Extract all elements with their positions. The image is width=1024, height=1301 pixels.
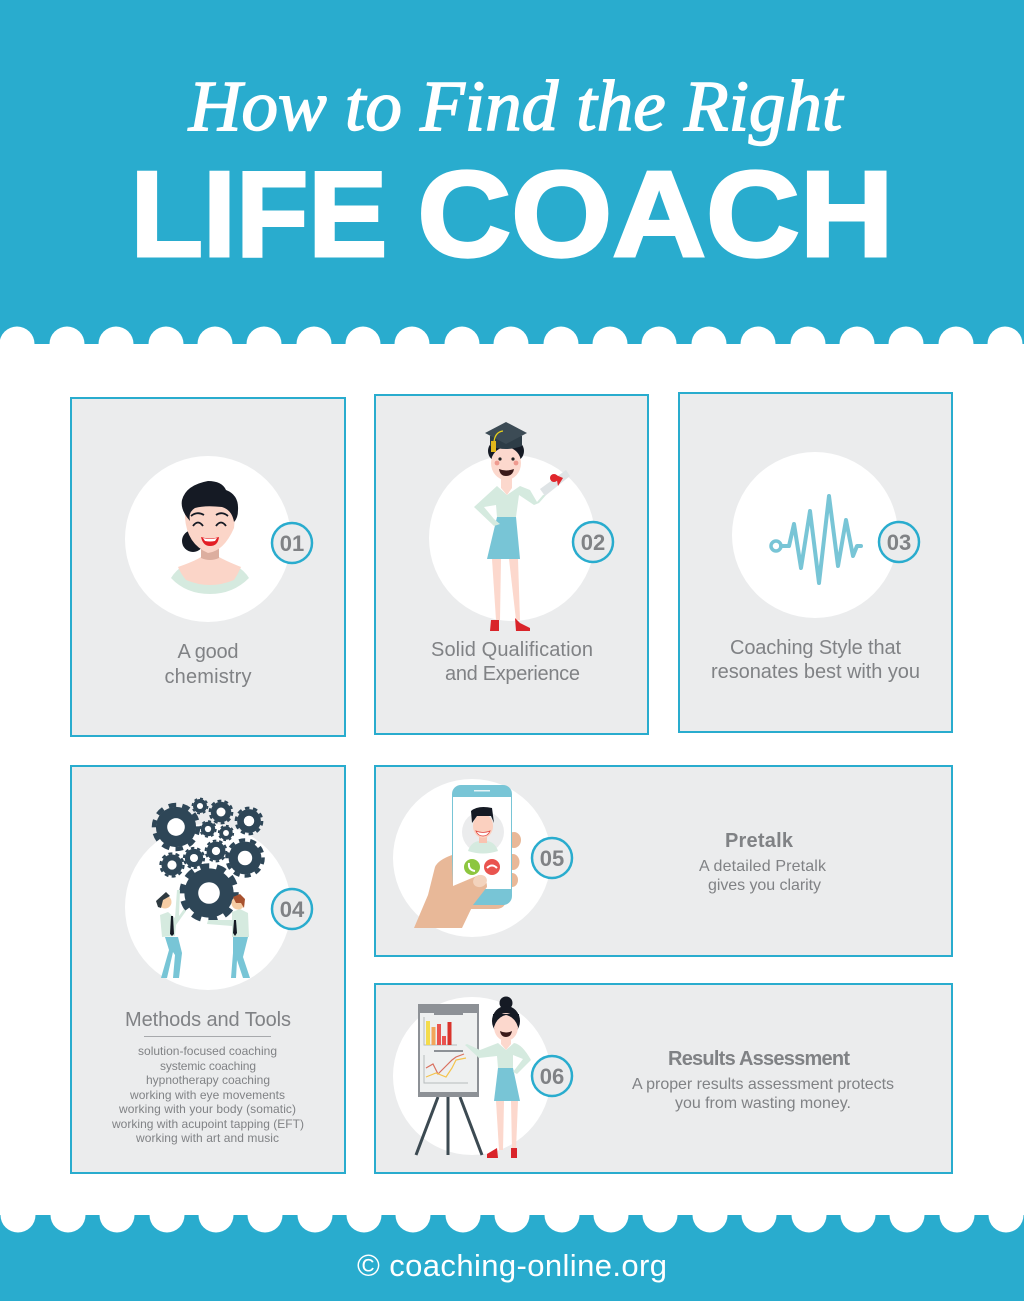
list of methods: systemic coaching: [160, 1059, 256, 1073]
badge 05: [532, 838, 572, 878]
label 03: resonates best with you: [711, 661, 920, 683]
title: main line: COACH: [417, 146, 894, 282]
title: script line: How to Find the Right: [188, 65, 844, 146]
label 01: A good: [178, 641, 238, 663]
text: results assessment: A proper results assessment protects: [632, 1076, 894, 1093]
icon: graduate woman with diploma: [474, 422, 570, 631]
panel 04: methods and tools: [71, 766, 345, 1173]
circle backdrop 05: [393, 779, 551, 937]
badge 02: [573, 522, 613, 562]
list of methods: [111, 1036, 304, 1145]
panel 01: chemistry: [71, 398, 345, 736]
icon: gears held by two men: [154, 798, 263, 978]
badge 02: 02: [581, 530, 605, 555]
text: pretalk: Pretalk: [725, 830, 794, 852]
title: main line: [131, 146, 894, 282]
badge 03: [879, 522, 919, 562]
badge 04: [272, 889, 312, 929]
badge 01: [272, 523, 312, 563]
title: main line: LIFE: [131, 146, 387, 282]
text: pretalk: [699, 830, 827, 894]
badge 03: 03: [887, 530, 911, 555]
text: results assessment: you from wasting money.: [675, 1095, 851, 1112]
label 02: [431, 639, 593, 685]
list of methods: working with your body (somatic): [118, 1102, 296, 1116]
text: results assessment: [632, 1048, 894, 1112]
panel 03: coaching style: [679, 393, 952, 732]
circle backdrop 06: [393, 997, 551, 1155]
text: pretalk: gives you clarity: [708, 877, 821, 894]
circle backdrop 03: [732, 452, 898, 618]
circle backdrop 02: [429, 455, 595, 621]
list of methods: solution-focused coaching: [138, 1044, 277, 1058]
badge 06: 06: [540, 1064, 564, 1089]
list of methods: working with art and music: [135, 1131, 279, 1145]
icon: smiling woman portrait: [171, 481, 249, 594]
label 02: and Experience: [445, 663, 580, 685]
circle backdrop 04: [125, 824, 291, 990]
header banner: [0, 0, 1024, 362]
panel 02: qualification: [375, 395, 648, 734]
panel 05: pretalk: [375, 766, 952, 956]
label 01: chemistry: [164, 666, 252, 688]
list of methods: hypnotherapy coaching: [146, 1073, 270, 1087]
footer banner: [0, 1198, 1024, 1301]
text: pretalk: A detailed Pretalk: [699, 858, 827, 875]
circle backdrop 01: [125, 456, 291, 622]
icon: sound wave: [771, 496, 861, 583]
icon: hand holding phone: [414, 785, 521, 928]
badge 04: 04: [280, 897, 305, 922]
label 01: [164, 641, 252, 688]
icon: flip chart on easel: [416, 1004, 482, 1155]
text: results assessment: Results Assessment: [668, 1048, 850, 1070]
list of methods: working with eye movements: [129, 1088, 285, 1102]
list of methods: working with acupoint tapping (EFT): [111, 1117, 304, 1131]
icon: woman presenting: [465, 996, 531, 1158]
footer text: © coaching-online.org: [357, 1248, 667, 1283]
badge 06: [532, 1056, 572, 1096]
panel 06: results assessment: [375, 984, 952, 1173]
heading 04: Methods and Tools: [125, 1009, 291, 1031]
label 03: Coaching Style that: [730, 637, 901, 659]
badge 01: 01: [280, 531, 304, 556]
badge 05: 05: [540, 846, 564, 871]
label 02: Solid Qualification: [431, 639, 593, 661]
label 03: [711, 637, 920, 683]
